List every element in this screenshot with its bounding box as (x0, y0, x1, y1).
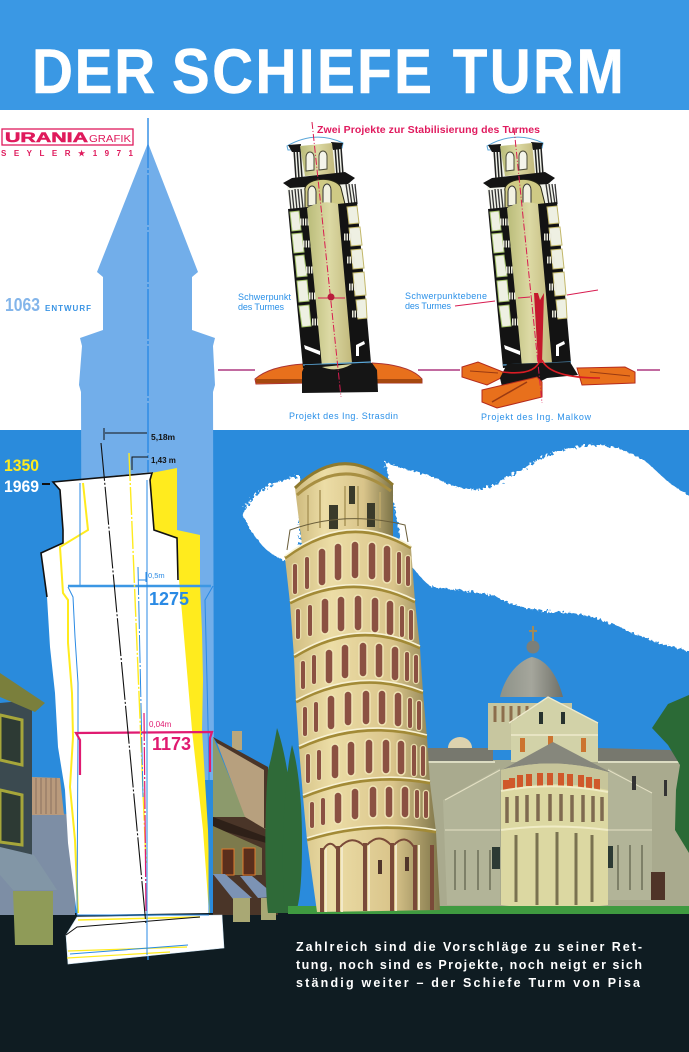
panel: stabilisation projects (218, 122, 660, 422)
shape 1350 (146, 468, 210, 913)
logo: Urania Grafik: URANIA (5, 130, 88, 145)
caption: Zahlreich sind die Vorschläge zu seiner Ret- (296, 940, 642, 954)
project Malkow: Projekt des Ing. Malkow (481, 412, 592, 422)
outline 1173 (76, 732, 212, 775)
ground line (218, 369, 660, 371)
label: 1063 Entwurf (5, 295, 91, 315)
label: years 1350 and 1969: 1969 (4, 477, 39, 496)
logo: Urania Grafik (1, 129, 134, 158)
title: SCHIEFE (172, 36, 432, 107)
heading: Zwei Projekte zur Stabilisierung des Turmes (317, 124, 540, 136)
dome (488, 703, 572, 750)
caption (296, 940, 642, 990)
dimension 1,43 m (132, 456, 176, 470)
label: 1063 Entwurf: 1063 (5, 295, 40, 315)
outline 1350 (60, 483, 88, 913)
apse (501, 763, 608, 908)
nave and aisles (428, 760, 689, 907)
dimension 0,5 m: 0,5m (148, 571, 165, 580)
title (32, 36, 624, 107)
label: years 1350 and 1969: 1350 (4, 456, 39, 475)
title: TURM (453, 36, 624, 107)
height diagram (41, 428, 224, 964)
small dome (448, 737, 472, 748)
lawn (288, 906, 689, 914)
axes (101, 443, 146, 925)
year 1173: 1173 (152, 734, 191, 754)
design axis (147, 118, 149, 960)
cathedral of Pisa (428, 626, 689, 908)
logo: Urania Grafik: GRAFIK (89, 133, 131, 145)
apse roof (502, 742, 610, 772)
project Strasdin (238, 122, 422, 421)
sky (0, 430, 689, 920)
belfry (295, 464, 393, 545)
dimension 5,18 m (104, 428, 176, 442)
ground (0, 913, 689, 1052)
dimension 5,18 m: 5,18m (151, 432, 176, 442)
dimension 0,5 m (138, 571, 165, 582)
arcades (322, 545, 405, 820)
project Malkow: des Turmes (405, 301, 452, 311)
upper gable (511, 697, 598, 762)
clouds (243, 445, 689, 652)
tree right (652, 695, 689, 853)
outline 1275 (68, 483, 213, 915)
project Strasdin: Schwerpunkt (238, 292, 291, 302)
transept gables (443, 768, 652, 905)
ghost tower: 1063 design (79, 118, 215, 960)
label: years 1350 and 1969 (4, 456, 50, 496)
cornices (285, 532, 436, 840)
project Strasdin: Projekt des Ing. Strasdin (289, 411, 398, 421)
year 1275: 1275 (149, 589, 189, 609)
title band (0, 0, 689, 110)
gallery railing (287, 519, 408, 550)
project Malkow (405, 128, 635, 422)
dimension 0,04 m: 0,04m (149, 720, 172, 729)
dimension 1,43 m: 1,43 m (151, 456, 176, 465)
base storey (322, 843, 432, 912)
right houses (213, 731, 278, 922)
leaning tower illustration (285, 464, 440, 912)
title: DER (32, 36, 155, 107)
project Strasdin: des Turmes (238, 302, 284, 312)
foundation (66, 917, 90, 935)
body (285, 532, 440, 912)
logo: Urania Grafik: SEYLER★1971 (1, 149, 134, 158)
caption: tung, noch sind es Projekte, noch neigt er sich (296, 958, 642, 972)
caption: ständig weiter – der Schiefe Turm von Pisa (296, 976, 641, 990)
shape 1969 (41, 472, 209, 915)
label: 1063 Entwurf: ENTWURF (45, 304, 91, 313)
outline 1969 (41, 473, 178, 597)
project Malkow: Schwerpunktebene (405, 291, 487, 301)
left houses (0, 673, 75, 945)
cypress trees (265, 728, 302, 913)
